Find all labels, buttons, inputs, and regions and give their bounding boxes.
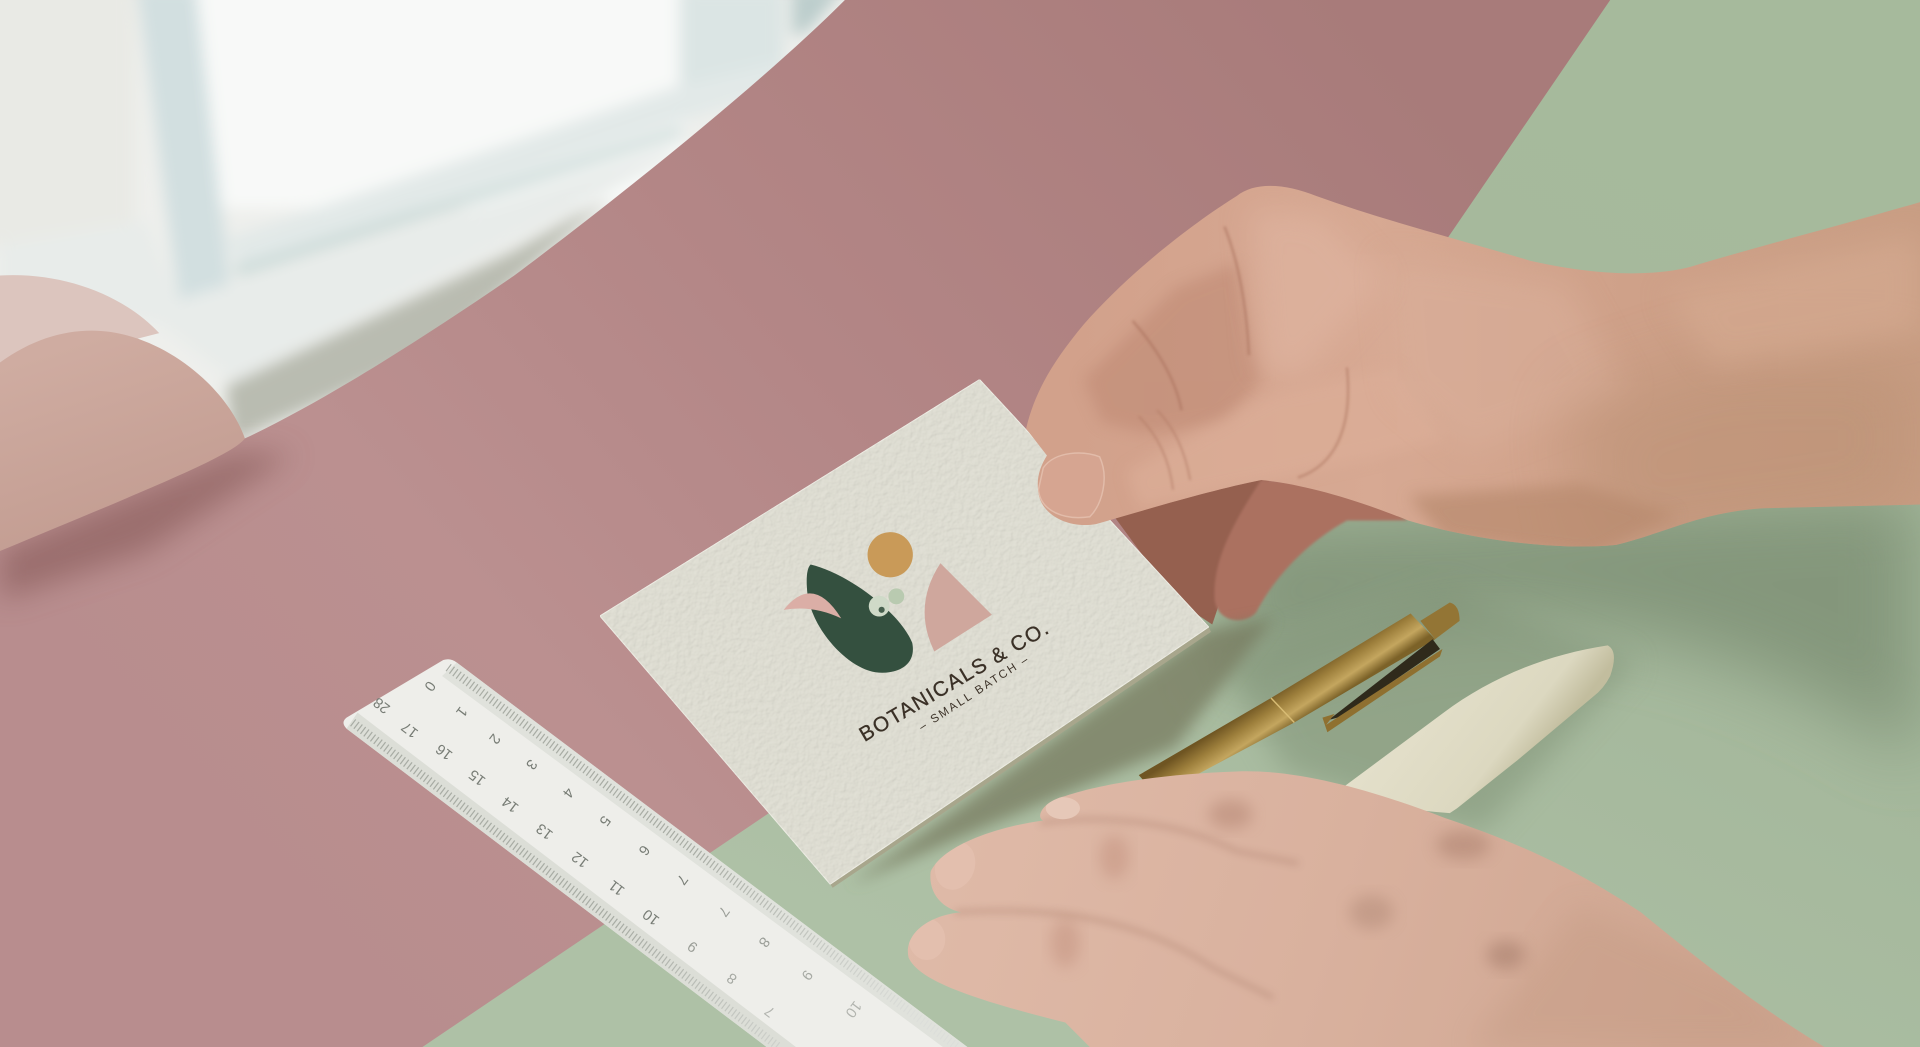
sash shadow line (233, 127, 686, 277)
ruler upper numbers: 6 (635, 842, 652, 858)
business card (600, 380, 1211, 888)
finger gaps (955, 819, 1298, 998)
ruler (343, 659, 967, 1047)
pen clicker (1420, 602, 1460, 639)
index finger shading (1084, 263, 1261, 435)
bone folder (1335, 645, 1614, 813)
ruler upper numbers: 0 (420, 678, 438, 694)
shadow of upper hand on green (1224, 490, 1920, 759)
ruler lower numbers (371, 694, 778, 1020)
window background (0, 0, 1053, 588)
wrist shading (1520, 933, 1637, 1021)
knuckle shadows (1436, 830, 1490, 860)
flower (869, 588, 904, 617)
card edge (830, 627, 1211, 888)
ruler lower numbers: 13 (534, 820, 556, 842)
card subtitle: – SMALL BATCH – (917, 653, 1031, 734)
roll face (0, 331, 245, 551)
ruler lower ticks (353, 722, 779, 1047)
ruler upper numbers: 3 (522, 756, 540, 772)
logo (784, 532, 992, 673)
pen clip (1322, 649, 1442, 732)
orange circle (868, 532, 913, 577)
index finger creases (1133, 227, 1249, 410)
roll shadow (0, 453, 294, 600)
gold pen (1139, 602, 1460, 796)
green paper sheet (422, 0, 1920, 1047)
ruler upper numbers (420, 678, 864, 1020)
ruler lower numbers: 8 (724, 969, 740, 987)
window mullion (137, 0, 233, 309)
green teardrop (807, 565, 913, 673)
ruler lower numbers: 12 (569, 848, 592, 870)
ruler upper numbers: 5 (596, 812, 613, 828)
lower fingers behind the card (1108, 471, 1408, 625)
ruler lower numbers: 11 (606, 876, 628, 898)
ruler body (343, 659, 967, 1047)
wrist shadow (1589, 374, 1901, 531)
ruler upper numbers: 9 (798, 967, 815, 983)
thumb highlight (1144, 424, 1260, 494)
finger nails (936, 843, 964, 864)
ruler upper numbers: 7 (673, 871, 690, 887)
pink leaf (784, 593, 841, 618)
thumb nail (1038, 453, 1104, 518)
ruler upper numbers: 10 (842, 998, 864, 1020)
card face (600, 380, 1209, 884)
knuckle creases on thumb (1139, 410, 1190, 490)
lower hand (908, 771, 1824, 1047)
thumb crease (1298, 367, 1348, 478)
ruler upper numbers: 4 (559, 784, 577, 800)
ruler lower numbers: 28 (371, 694, 393, 716)
shadow beside pen and bone folder (1224, 588, 1635, 833)
ruler upper numbers: 1 (452, 703, 470, 719)
ruler lower numbers: 9 (685, 937, 701, 955)
palm heel shadow (1413, 483, 1660, 546)
ruler lower numbers: 7 (762, 1002, 778, 1020)
ruler upper numbers: 2 (485, 730, 503, 746)
roll top (0, 275, 159, 382)
half cylinder paper roll (0, 275, 294, 600)
card shadow (851, 618, 1273, 884)
ruler lower numbers: 10 (640, 905, 663, 928)
pen collar (1271, 698, 1294, 722)
ruler lower numbers: 16 (433, 740, 456, 763)
card title: BOTANICALS & CO. (855, 617, 1053, 746)
window far frame (792, 0, 845, 37)
upper hand holding the card (1026, 186, 1920, 563)
ruler lower numbers: 14 (499, 793, 522, 815)
back of hand highlight (1550, 315, 1587, 382)
ruler upper tick strip (442, 662, 967, 1047)
ruler upper numbers: 8 (755, 934, 772, 950)
ruler lower tick strip (347, 713, 796, 1047)
pen clip slot (1329, 639, 1440, 720)
window right frame (680, 0, 784, 92)
arm highlight (1716, 268, 1900, 350)
pen barrel (1139, 614, 1435, 796)
wall below the sill (227, 196, 612, 441)
ruler upper ticks (448, 667, 958, 1047)
ruler upper numbers: 7 (714, 903, 732, 919)
ruler lower numbers: 17 (399, 718, 422, 741)
window sash (227, 61, 784, 267)
pink wedge (925, 563, 992, 651)
knuckle highlight (1262, 222, 1356, 360)
ruler lower numbers: 15 (466, 766, 489, 788)
window sill (0, 145, 680, 380)
